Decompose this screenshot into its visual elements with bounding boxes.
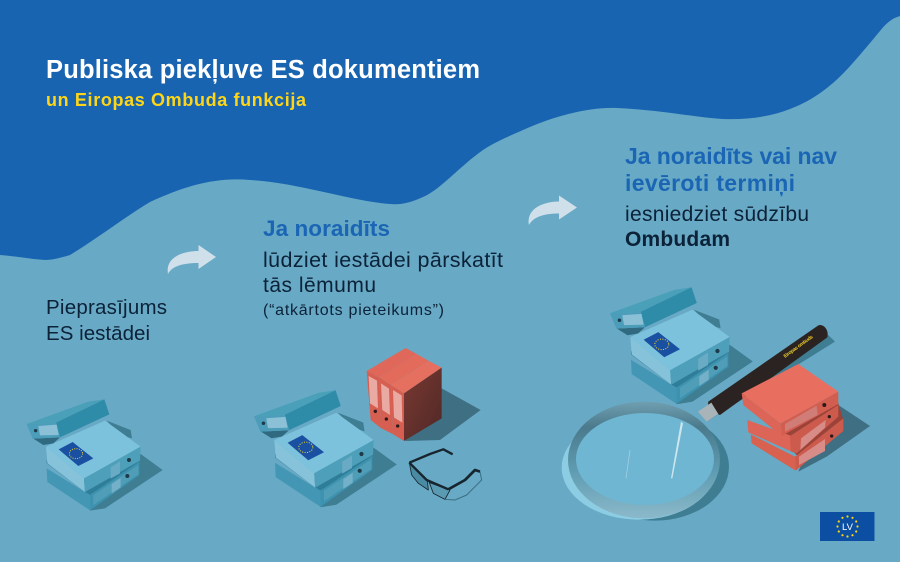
text block: complaint to Ombudsman: iesniedziet sūdzību bbox=[625, 203, 809, 226]
arrow: first step bbox=[168, 245, 216, 274]
text block: if rejected: tās lēmumu bbox=[263, 274, 376, 297]
text block: request: Pieprasījums bbox=[46, 296, 167, 319]
EU flag badge LV: LV bbox=[842, 522, 854, 533]
title: Publiska piekļuve ES dokumentiem bbox=[46, 56, 480, 84]
text block: complaint to Ombudsman: Ombudam bbox=[625, 228, 730, 251]
text block: request bbox=[46, 296, 167, 345]
text block: if rejected: lūdziet iestādei pārskatīt bbox=[263, 248, 503, 272]
folder stack: second step bbox=[254, 390, 397, 507]
red binders bbox=[367, 348, 481, 441]
folder stack: first step bbox=[27, 399, 163, 511]
magnifying glass lens bbox=[562, 402, 729, 521]
top folder bbox=[742, 364, 838, 436]
EU flag badge LV bbox=[820, 512, 874, 541]
text block: complaint to Ombudsman bbox=[625, 143, 837, 251]
middle folder bbox=[747, 405, 838, 453]
title block bbox=[46, 56, 480, 110]
arrow: second step bbox=[529, 196, 577, 225]
text block: request: ES iestādei bbox=[46, 322, 150, 345]
header wave band bbox=[0, 0, 900, 260]
heading: if rejected: Ja noraidīts bbox=[263, 216, 390, 241]
heading: if rejected or deadline missed: Ja noraidīts vai nav bbox=[625, 143, 837, 169]
glasses bbox=[409, 449, 482, 500]
text block: if rejected bbox=[263, 216, 503, 319]
subtitle: un Eiropas Ombuda funkcija bbox=[46, 90, 307, 110]
magnifying glass handle: Eiropas ombuds bbox=[783, 334, 815, 360]
magnifying glass handle bbox=[698, 325, 835, 422]
red folder stack bbox=[742, 364, 870, 472]
folder stack: third step bbox=[610, 287, 753, 404]
text block: if rejected: (“atkārtots pieteikums”) bbox=[263, 302, 444, 319]
bottom folder bbox=[751, 418, 843, 471]
text block: complaint to Ombudsman: ievēroti termiņi bbox=[625, 170, 795, 196]
